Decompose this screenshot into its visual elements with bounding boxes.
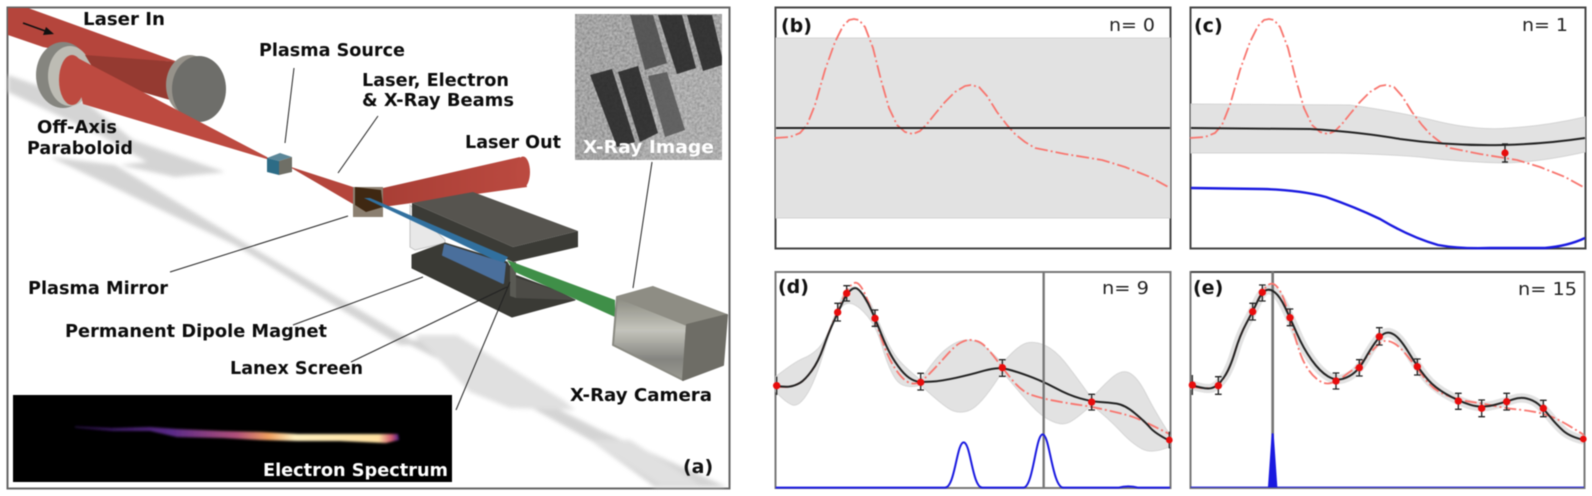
label: (a): (a) bbox=[683, 456, 713, 478]
true function bbox=[776, 283, 1170, 434]
data points with error bars bbox=[1192, 285, 1547, 417]
label: Plasma Source: Plasma Source bbox=[259, 41, 405, 61]
true function bbox=[1192, 284, 1584, 435]
leader lines bbox=[170, 68, 652, 410]
label: n= 0: n= 0 bbox=[1109, 15, 1155, 36]
posterior mean bbox=[1191, 128, 1585, 145]
label: n= 9: n= 9 bbox=[1102, 278, 1149, 299]
data points with error bars bbox=[773, 286, 1173, 448]
label: Permanent Dipole Magnet: Permanent Dipole Magnet bbox=[65, 322, 327, 342]
acquisition function bbox=[776, 434, 1170, 488]
icon: beam direction arrow bbox=[23, 23, 54, 35]
right mirror bbox=[166, 55, 226, 122]
label: n= 1: n= 1 bbox=[1522, 15, 1568, 36]
acquisition function bbox=[1191, 188, 1585, 248]
inset: electron spectrum: Electron Spectrum bbox=[263, 461, 448, 481]
uncertainty band bbox=[776, 38, 1170, 218]
posterior mean bbox=[1192, 290, 1584, 440]
vertical marker bbox=[1269, 272, 1277, 488]
label: Laser, Electron and X-Ray Beams: & X-Ray Beams bbox=[362, 91, 514, 111]
beam: focused beam to plasma source bbox=[59, 55, 270, 160]
off-axis paraboloid mirror bbox=[36, 42, 92, 108]
label: Plasma Mirror: Plasma Mirror bbox=[28, 279, 168, 299]
true function bbox=[1190, 19, 1585, 188]
inset: x-ray image: X-Ray Image bbox=[583, 138, 714, 158]
magnet glass bbox=[410, 205, 445, 250]
beam: electron bbox=[364, 198, 508, 264]
acquisition function bbox=[1191, 433, 1584, 488]
plasma source cube bbox=[267, 153, 292, 175]
panel (e): n=15 bbox=[1189, 272, 1587, 488]
label: Off-Axis Paraboloid: Off-Axis bbox=[37, 118, 117, 138]
inset: electron spectrum bbox=[13, 395, 452, 482]
label: Off-Axis Paraboloid: Paraboloid bbox=[27, 139, 133, 159]
label: X-Ray Camera: X-Ray Camera bbox=[570, 386, 712, 406]
beam: x-ray bbox=[507, 260, 615, 317]
plasma mirror bbox=[353, 187, 383, 217]
label: Off-Axis Paraboloid bbox=[27, 118, 133, 159]
plot in zoomed coordinates bbox=[1189, 272, 1587, 488]
vertical marker bbox=[1040, 272, 1047, 488]
uncertainty band bbox=[1191, 104, 1585, 163]
panel (d): n=9 bbox=[773, 272, 1173, 488]
floor shadows bbox=[8, 75, 727, 487]
label: Laser, Electron and X-Ray Beams bbox=[362, 71, 514, 111]
label: Laser, Electron and X-Ray Beams: Laser, Electron bbox=[362, 71, 509, 91]
plot in zoomed coordinates bbox=[773, 272, 1173, 488]
data point with error bar bbox=[1501, 144, 1509, 162]
permanent dipole magnet bbox=[412, 192, 578, 317]
label: (b): (b) bbox=[781, 15, 812, 37]
beam: laser out bbox=[383, 156, 530, 207]
true function bbox=[775, 19, 1170, 188]
uncertainty band bbox=[776, 287, 1170, 451]
beam: plasma source to plasma mirror bbox=[288, 166, 353, 204]
panel (b): n=0 prior bbox=[775, 8, 1170, 248]
beam: reflected beam between mirrors bbox=[85, 55, 178, 100]
uncertainty band bbox=[1192, 290, 1584, 440]
label: n= 15: n= 15 bbox=[1518, 279, 1577, 300]
label: (e): (e) bbox=[1193, 277, 1223, 299]
label: (c): (c) bbox=[1194, 15, 1223, 37]
lanex screen bbox=[443, 245, 505, 283]
label: Laser In: Laser In bbox=[83, 10, 165, 30]
panel (c): n=1 bbox=[1190, 8, 1586, 248]
beam: laser in bbox=[8, 8, 178, 62]
x-ray camera bbox=[613, 287, 727, 380]
label: Laser Out: Laser Out bbox=[465, 133, 561, 153]
inset: x-ray image bbox=[575, 14, 722, 160]
panel (a): experimental setup bbox=[8, 8, 730, 488]
label: Lanex Screen: Lanex Screen bbox=[230, 359, 363, 379]
label: (d): (d) bbox=[778, 276, 809, 298]
posterior mean bbox=[776, 288, 1170, 441]
posterior mean bbox=[776, 127, 1170, 129]
